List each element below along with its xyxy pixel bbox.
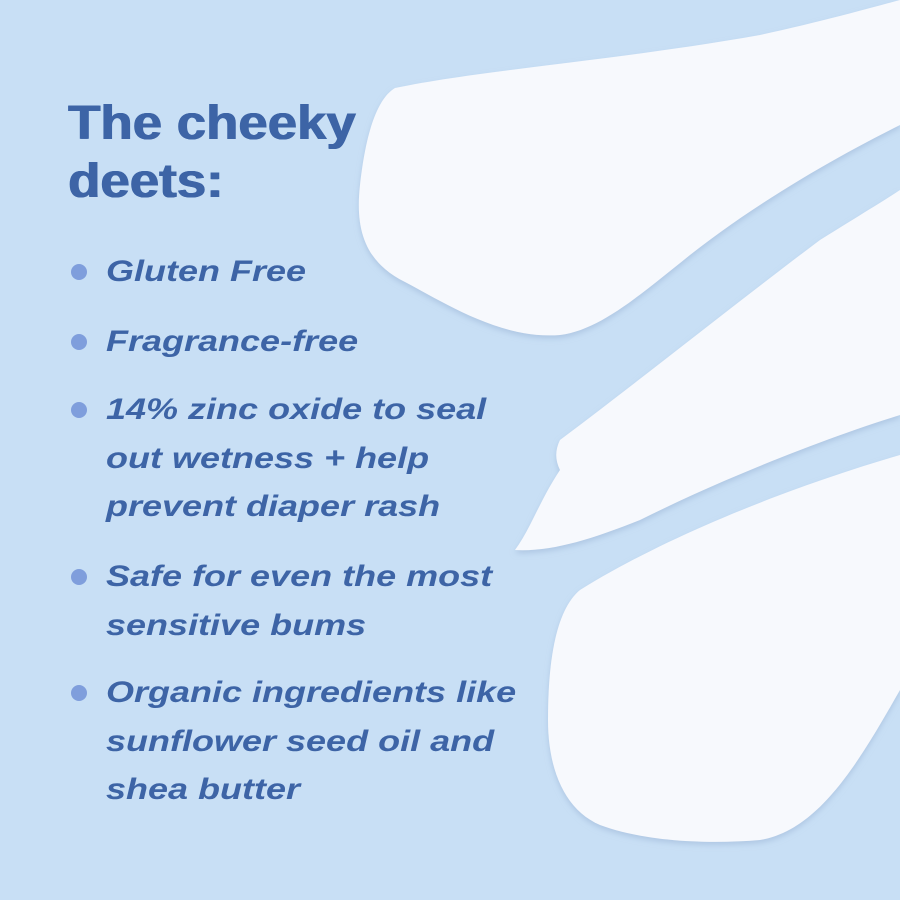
text: 14% zinc oxide to seal xyxy=(106,393,486,426)
bullet list xyxy=(71,255,516,806)
text: prevent diaper rash xyxy=(106,490,440,523)
bullet: organic xyxy=(71,676,516,806)
text: Safe for even the most xyxy=(106,560,492,593)
smear 3 xyxy=(548,455,900,842)
smear 2 xyxy=(515,190,900,550)
text: sensitive bums xyxy=(106,608,366,642)
title xyxy=(68,97,356,208)
title: deets: xyxy=(68,155,224,208)
text: shea butter xyxy=(106,773,300,806)
bullet: sensitive xyxy=(71,560,494,642)
title: The cheeky xyxy=(68,97,356,150)
text: Fragrance-free xyxy=(106,325,358,358)
smear 1 xyxy=(359,0,900,335)
bullet: gluten free xyxy=(71,255,306,288)
bullet: fragrance-free xyxy=(71,325,358,358)
text: sunflower seed oil and xyxy=(106,724,494,758)
text: Organic ingredients like xyxy=(106,676,516,709)
bullet: zinc oxide xyxy=(71,393,487,523)
text: out wetness + help xyxy=(106,442,429,474)
text: Gluten Free xyxy=(106,255,306,288)
